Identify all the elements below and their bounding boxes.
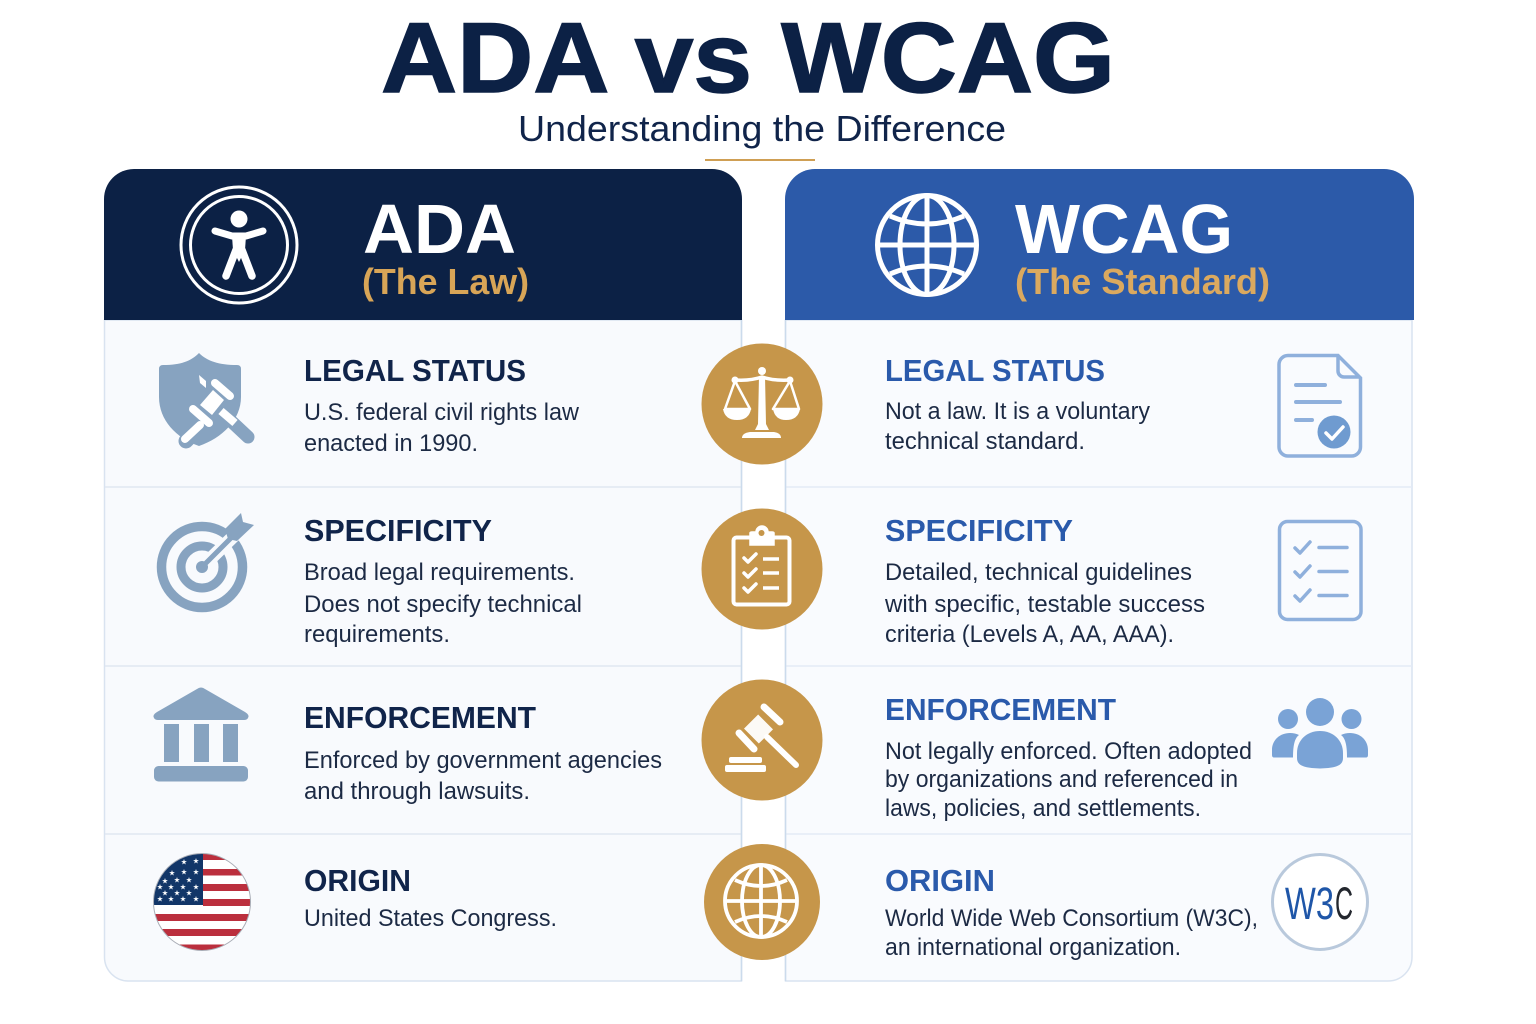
heading: ENFORCEMENT	[885, 692, 1116, 727]
header band	[104, 169, 742, 320]
body text	[304, 559, 582, 648]
body text: criteria (Levels A, AA, AAA).	[885, 621, 1174, 648]
row dividers	[786, 487, 1412, 834]
panel: ADA	[104, 169, 742, 981]
icon: shield and gavel	[159, 353, 248, 446]
body text: United States Congress.	[304, 905, 557, 932]
heading: SPECIFICITY	[885, 513, 1073, 548]
icon: W3C logo: W3	[1285, 878, 1334, 929]
body text: with specific, testable success	[884, 591, 1205, 618]
icon: US flag	[153, 853, 251, 951]
title: ADA vs WCAG	[381, 2, 1115, 113]
body text	[885, 398, 1150, 455]
icon: W3C logo	[1272, 854, 1368, 950]
icon: scales of justice	[702, 344, 822, 464]
center column separators	[742, 320, 786, 981]
row: enforcement	[885, 692, 1368, 822]
body text	[304, 399, 580, 457]
body text: enacted in 1990.	[304, 430, 478, 457]
body text: technical standard.	[885, 428, 1085, 455]
body text	[884, 559, 1205, 648]
row: enforcement	[153, 688, 662, 805]
body text: and through lawsuits.	[304, 778, 530, 805]
row: specificity	[884, 513, 1361, 648]
body text: laws, policies, and settlements.	[885, 795, 1201, 822]
body text: Not a law. It is a voluntary	[885, 398, 1150, 425]
header title WCAG: WCAG	[1015, 190, 1233, 268]
body text: World Wide Web Consortium (W3C),	[885, 905, 1258, 932]
header title ADA: ADA	[363, 190, 516, 268]
body text: U.S. federal civil rights law	[304, 399, 580, 426]
row dividers	[105, 487, 741, 834]
icon: accessibility figure	[181, 187, 297, 303]
icon: government building	[153, 688, 249, 782]
panel: WCAG	[785, 169, 1414, 981]
icon: checklist	[1280, 522, 1361, 620]
heading: ENFORCEMENT	[304, 700, 536, 735]
heading: SPECIFICITY	[304, 513, 492, 548]
gold divider under subtitle	[705, 159, 815, 161]
icon: gavel	[702, 680, 822, 800]
heading: ORIGIN	[304, 863, 411, 898]
body text: Does not specify technical	[304, 591, 582, 618]
heading: ORIGIN	[885, 863, 995, 898]
header subtitle The Standard: (The Standard)	[1015, 261, 1270, 302]
body text: requirements.	[304, 621, 450, 648]
row: origin	[885, 854, 1368, 961]
body text: Enforced by government agencies	[304, 747, 662, 774]
row: legal status	[159, 353, 580, 457]
row: legal status	[885, 353, 1360, 456]
body text	[885, 905, 1258, 961]
heading: LEGAL STATUS	[304, 353, 526, 388]
row: specificity	[162, 513, 582, 648]
header band	[785, 169, 1414, 320]
subtitle: Understanding the Difference	[518, 108, 1006, 149]
icon: globe	[878, 195, 976, 295]
body text	[885, 738, 1252, 822]
icon: target with arrow	[162, 513, 254, 608]
body text: an international organization.	[885, 934, 1181, 961]
icon: document with check	[1279, 356, 1360, 456]
row: origin	[150, 850, 557, 954]
body text: Not legally enforced. Often adopted	[885, 738, 1252, 765]
header subtitle The Law: (The Law)	[362, 261, 529, 302]
body text	[304, 747, 662, 805]
panel body	[786, 320, 1412, 981]
icon: group of people	[1272, 698, 1368, 768]
heading: LEGAL STATUS	[885, 353, 1105, 388]
body text: by organizations and referenced in	[885, 766, 1238, 793]
icon: clipboard checklist	[702, 508, 822, 630]
icon: W3C logo: C	[1335, 878, 1353, 929]
icon: globe	[704, 844, 820, 960]
panel body	[104, 320, 742, 981]
body text: Broad legal requirements.	[304, 559, 575, 586]
body text: Detailed, technical guidelines	[885, 559, 1192, 586]
